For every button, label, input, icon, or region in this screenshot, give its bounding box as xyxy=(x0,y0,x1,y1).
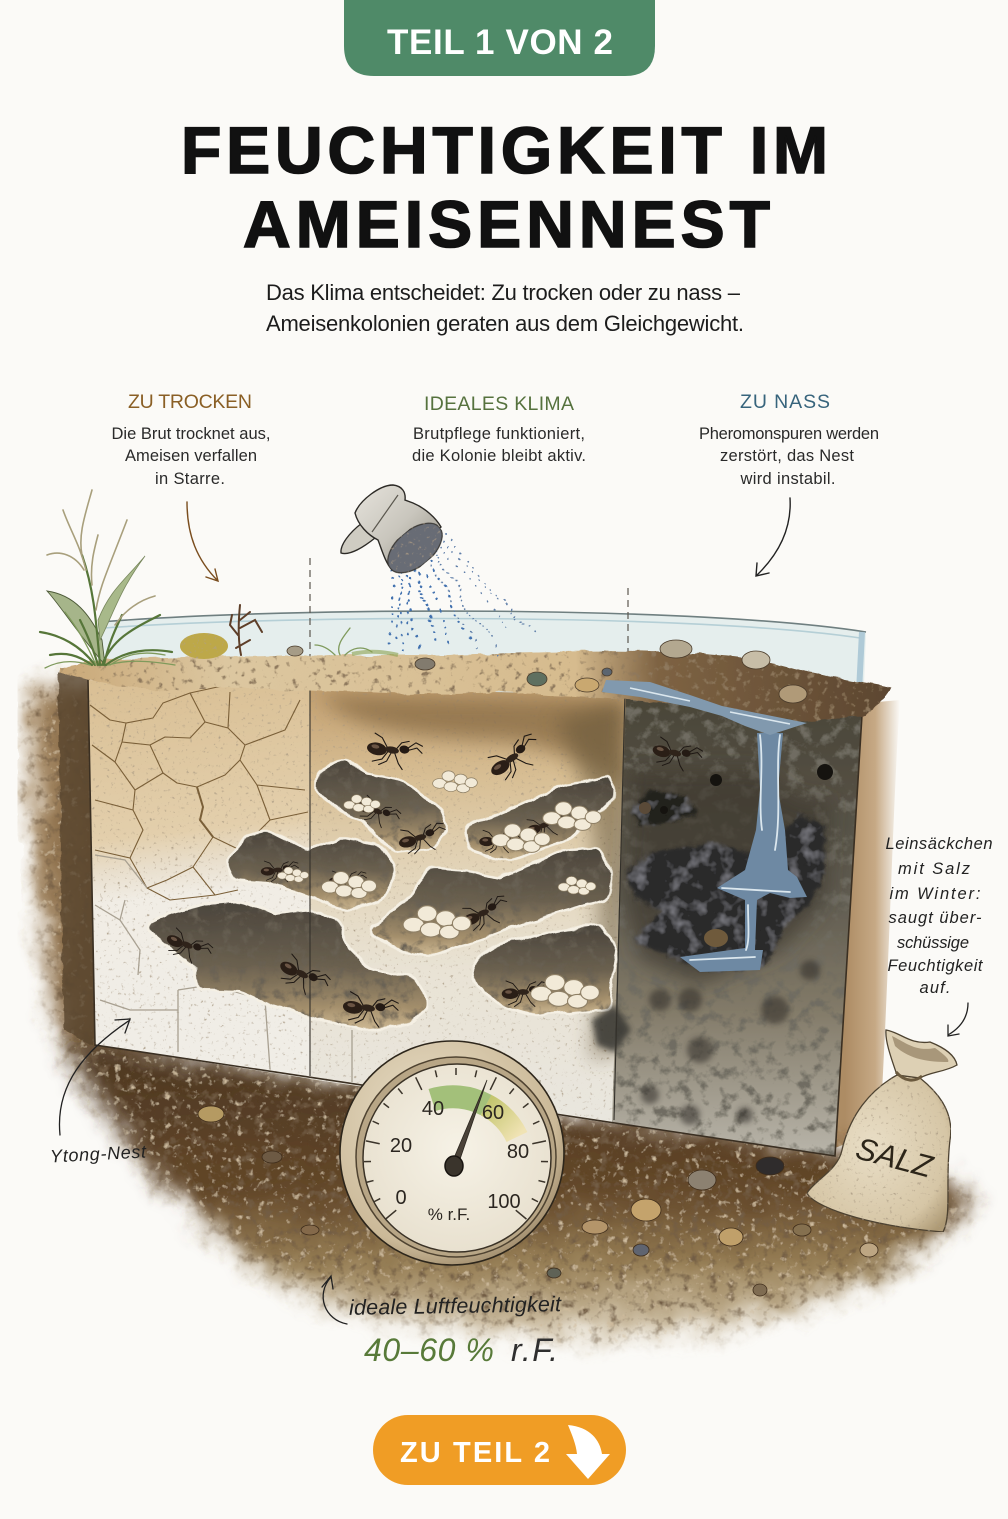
icon: watering can rose xyxy=(341,485,451,582)
nest block xyxy=(88,680,862,1156)
wet rock mass xyxy=(625,770,830,985)
block outline xyxy=(88,680,862,1156)
joints between pale blocks xyxy=(95,855,540,1110)
annotation: Leinsäckchen: Leinsäckchen xyxy=(886,835,992,853)
column: zu trocken: ZU TROCKEN xyxy=(128,391,252,413)
moisture beads xyxy=(639,764,833,814)
scale numbers: 100 xyxy=(487,1191,521,1213)
chamber 4 xyxy=(370,850,610,953)
unit: % r.F. xyxy=(428,1205,470,1224)
plants: grass xyxy=(40,490,372,668)
water spray xyxy=(388,534,540,655)
wet cave upper xyxy=(633,790,697,826)
annotation: Leinsäckchen: mit Salz xyxy=(898,860,971,878)
icon: arrow xyxy=(566,1425,610,1479)
column: zu trocken xyxy=(112,391,270,488)
column: ideales Klima: Brutpflege funktioniert, xyxy=(413,425,585,443)
annotation: Leinsäckchen: schüssige xyxy=(897,934,969,952)
column: zu nass: Pheromonspuren werden xyxy=(699,425,879,443)
ideal range arc xyxy=(432,1097,517,1137)
column: zu nass: zerstört, das Nest xyxy=(720,447,854,465)
column: zu nass: wird instabil. xyxy=(740,470,836,488)
ants xyxy=(162,731,704,1030)
annotation: ideale Luftfeuchtigkeit: ideale Luftfeuchtigkeit xyxy=(349,1292,562,1320)
column: zu trocken: Die Brut trocknet aus, xyxy=(112,425,270,443)
subtitle: Ameisenkolonien geraten aus dem Gleichgewicht. xyxy=(266,311,744,336)
plants: dry shrub xyxy=(180,605,398,659)
arrow: Leinsäckchen xyxy=(948,1003,968,1036)
icon: humidity gauge xyxy=(340,1041,564,1265)
arrow: zu nass xyxy=(756,498,790,576)
title: FEUCHTIGKEIT IM xyxy=(181,113,828,187)
wet cave lower xyxy=(627,813,825,970)
brood xyxy=(277,771,601,1008)
glass terrarium xyxy=(100,611,866,712)
ground pebbles xyxy=(198,1106,878,1296)
scale numbers: 80 xyxy=(507,1141,529,1163)
dark stains xyxy=(641,960,820,1125)
column: zu trocken: in Starre. xyxy=(155,470,225,488)
column: zu trocken: Ameisen verfallen xyxy=(125,447,257,465)
soil pebbles xyxy=(287,640,807,703)
zone: dry soil xyxy=(88,680,312,1079)
stain at block edge xyxy=(592,1005,631,1052)
chamber 3 xyxy=(230,832,393,907)
value: 40-60 % r.F.: 40–60 % xyxy=(364,1332,494,1368)
soil: surrounding ground xyxy=(30,672,975,1335)
chamber 5 xyxy=(148,903,427,1028)
column: ideales Klima: IDEALES KLIMA xyxy=(424,393,574,415)
badge: Teil 1 von 2: TEIL 1 VON 2 xyxy=(387,23,613,62)
annotation: Leinsäckchen: auf. xyxy=(920,979,950,997)
value: 40-60 % r.F.: r.F. xyxy=(511,1332,558,1368)
annotation: Leinsäckchen: saugt über- xyxy=(888,909,982,927)
subtitle: Das Klima entscheidet: Zu trocken oder zu nass – xyxy=(266,280,741,305)
scale numbers xyxy=(390,1098,529,1213)
zone: ideal soil xyxy=(310,688,630,1124)
needle xyxy=(451,1080,487,1168)
chamber 1 xyxy=(318,762,445,850)
column: ideales Klima: die Kolonie bleibt aktiv. xyxy=(412,447,586,465)
top soil layer xyxy=(60,640,893,735)
title xyxy=(181,113,828,261)
surface water xyxy=(602,680,807,735)
scale numbers: 20 xyxy=(390,1135,412,1157)
column: zu nass: ZU NASS xyxy=(740,391,830,413)
zone divider lines, upper xyxy=(310,558,628,660)
column: zu nass xyxy=(699,391,879,488)
vertical divider lines xyxy=(310,690,625,1120)
zone: wet soil xyxy=(612,692,862,1156)
sack label: SALZ xyxy=(852,1131,937,1185)
chamber 2 xyxy=(467,780,610,857)
scale numbers: 40 xyxy=(422,1098,444,1120)
title: AMEISENNEST xyxy=(243,187,770,261)
value: 40-60 % r.F. xyxy=(364,1332,558,1368)
scale numbers: 60 xyxy=(482,1102,504,1124)
column: ideales Klima xyxy=(412,393,586,465)
cracks in dry soil xyxy=(90,686,308,900)
annotation: Leinsäckchen xyxy=(886,835,992,997)
arrow: zu trocken xyxy=(187,502,218,581)
annotation: Leinsäckchen: im Winter: xyxy=(890,885,980,903)
scale ticks xyxy=(364,1068,548,1219)
pebbles in cave xyxy=(704,875,785,947)
badge: Teil 1 von 2 xyxy=(344,0,655,76)
button: zu Teil 2: ZU TEIL 2 xyxy=(400,1437,550,1469)
brown damp transition xyxy=(320,695,625,790)
waterfall xyxy=(680,733,807,972)
annotation: Leinsäckchen: Feuchtigkeit xyxy=(888,957,984,975)
scale numbers: 0 xyxy=(395,1187,407,1209)
icon: salt sack xyxy=(807,1030,957,1232)
button: zu Teil 2 xyxy=(373,1415,626,1485)
chamber 6 xyxy=(473,927,613,1013)
arrow: ideal humidity xyxy=(322,1276,347,1324)
subtitle xyxy=(266,280,744,336)
arrow: Ytong-Nest xyxy=(59,1019,130,1135)
annotation: Ytong-Nest: Ytong-Nest xyxy=(50,1141,147,1166)
